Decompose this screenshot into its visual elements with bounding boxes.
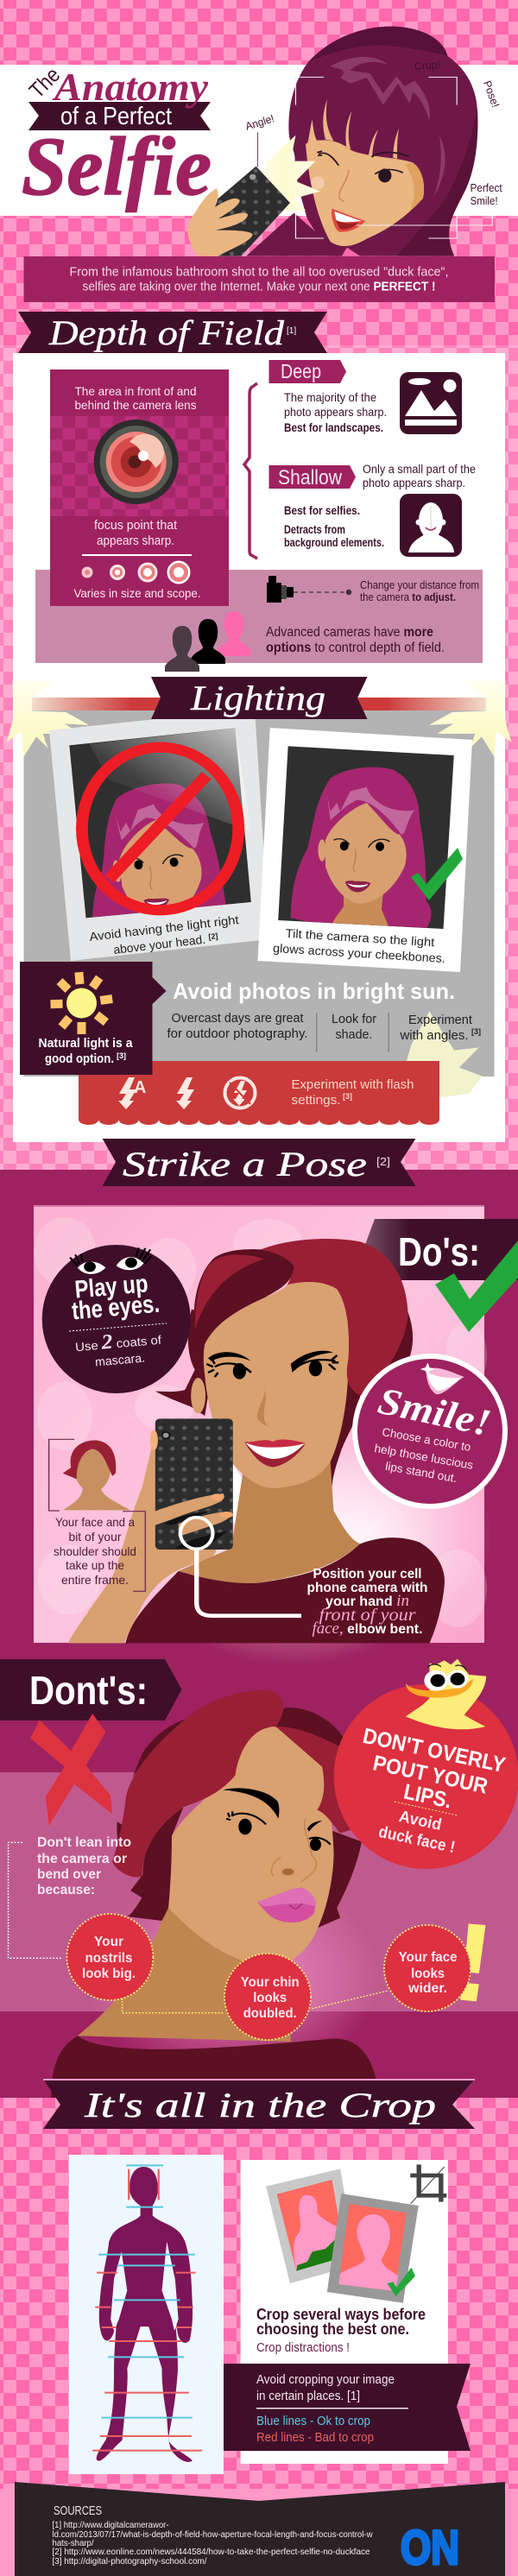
text: position your phone: front of your <box>319 1606 416 1625</box>
title: Selfie <box>22 120 212 212</box>
footer: sources <box>15 2482 505 2576</box>
icon: crop tool <box>410 2164 446 2204</box>
icon: three head silhouettes <box>165 611 251 672</box>
text: advanced cameras: Advanced cameras have more <box>266 625 433 640</box>
shallow field block: Shallow <box>278 466 343 489</box>
callout: wider face: wider. <box>407 1981 447 1996</box>
panel: depth of field white panel <box>13 353 505 1142</box>
deep field block: Best for landscapes. <box>284 421 383 434</box>
title: The <box>25 63 65 103</box>
photo: tilt the camera: glows across your cheekbones. <box>273 941 445 965</box>
figure silhouette <box>97 2167 193 2462</box>
callout: duck face: POUT YOUR <box>371 1751 490 1799</box>
deep field block <box>269 360 462 434</box>
intro banner: From the infamous bathroom shot to the all too overused "duck face", <box>69 264 449 280</box>
icon: landscape <box>400 372 462 434</box>
callout: duck face: LIPS. <box>401 1779 454 1813</box>
callout: chin <box>224 1954 311 2040</box>
labels around the selfie: Perfect <box>471 182 502 194</box>
text: avoid bright sun tips: shade. <box>335 1028 373 1042</box>
photo: tilt the camera <box>257 728 472 972</box>
heading: strike a pose ribbon <box>103 1139 415 1186</box>
legend: crop lines ribbon: Red lines - Bad to crop <box>256 2430 374 2445</box>
icon: flash settings: A <box>134 1078 146 1097</box>
shallow field block: Only a small part of the <box>363 463 476 476</box>
icon: prohibition sign <box>82 748 238 910</box>
flash settings awning: settings. <box>292 1094 340 1108</box>
callout: framing guide with mini figure: entire frame. <box>61 1573 129 1587</box>
footer: sources: [3] http://digital-photography-school.com/ <box>52 2556 207 2567</box>
flash settings awning: Experiment with flash <box>292 1078 414 1092</box>
text: avoid bright sun tips: Avoid photos in bright sun. <box>173 978 455 1004</box>
illustration: posing woman <box>67 1239 445 1643</box>
panel: body crop guide <box>69 2155 224 2474</box>
connector dots yellow <box>123 1991 388 2013</box>
text: don't lean: Don't lean into <box>37 1835 131 1850</box>
labels around the selfie: Crop! <box>414 59 440 73</box>
footer: sources: ld.com/2013/07/17/what-is-depth-of-field-how-aperture-focal-length-and-focus-control-w <box>52 2529 373 2540</box>
legend: crop lines ribbon: in certain places. [1] <box>256 2389 360 2403</box>
heading: don'ts ribbon: Dont's: <box>29 1668 148 1713</box>
text: advanced cameras: options to control depth of field. <box>266 641 445 655</box>
text: don't lean: the camera or <box>37 1852 127 1866</box>
heading: lighting ribbon <box>151 677 368 719</box>
heading: don'ts ribbon <box>0 1659 181 1720</box>
text: don't lean <box>37 1835 131 1897</box>
callout: duck face: DON'T OVERLY <box>361 1724 508 1777</box>
icon: green check small <box>387 2268 415 2296</box>
photo: avoid overhead light: [2] <box>208 931 218 941</box>
legend: crop lines ribbon: Avoid cropping your image <box>256 2372 395 2387</box>
heading: lighting ribbon: Lighting <box>190 679 325 717</box>
icon: lips <box>420 1362 464 1394</box>
text: position your phone: phone camera with <box>307 1581 428 1595</box>
legend: crop lines ribbon <box>224 2364 471 2451</box>
text: don't lean: because: <box>37 1883 95 1897</box>
text: do's label: Do's: <box>398 1229 480 1274</box>
illustration: header selfie woman <box>188 27 492 256</box>
flash settings awning: [3] <box>343 1092 352 1101</box>
callout: framing guide with mini figure: bit of your <box>69 1530 122 1544</box>
icon: depth of field rings <box>81 561 190 584</box>
crop lines <box>92 2165 202 2451</box>
icon: camera lens <box>94 420 179 504</box>
logo: ON: ON <box>401 2520 459 2574</box>
panel: strike a pose background <box>0 1170 518 2098</box>
callout: play up the eyes: the eyes. <box>71 1291 161 1325</box>
icon: camera to subject distance <box>267 576 351 603</box>
labels around the selfie: Angle! <box>244 112 275 133</box>
photo: avoid overhead light: above your head. <box>112 932 207 957</box>
photo: avoid overhead light <box>49 709 269 961</box>
callout: smile: lips stand out. <box>384 1460 458 1485</box>
callout: natural light: [3] <box>117 1051 126 1060</box>
heading: strike a pose ribbon: Strike a Pose <box>123 1145 367 1184</box>
brace <box>244 383 257 559</box>
photo: uncropped <box>266 2169 357 2283</box>
icon: red x <box>30 1714 112 1826</box>
callout: wider face: Your face <box>399 1950 458 1965</box>
callout: nostrils: look big. <box>82 1967 136 1981</box>
text: position your phone <box>307 1567 428 1638</box>
callout: smile: Choose a color to <box>381 1425 471 1454</box>
text: position your phone: your hand in <box>325 1592 409 1610</box>
callout: duck face <box>334 1659 518 1869</box>
callout: play up the eyes <box>42 1245 191 1393</box>
labels around the selfie: Smile! <box>471 195 498 207</box>
icon: lower burst <box>407 1012 483 1098</box>
footer: sources: SOURCES <box>54 2503 102 2518</box>
callout: chin: looks <box>253 1991 287 2005</box>
panel: depth of field definition card <box>50 369 229 606</box>
panel: crop photos: choosing the best one. <box>256 2320 409 2338</box>
text: position your phone: face, elbow bent. <box>313 1619 423 1638</box>
text: avoid bright sun tips: with angles. <box>399 1029 468 1043</box>
callout: smile: help those luscious <box>373 1442 475 1472</box>
shallow field block: Detracts from <box>284 523 345 536</box>
callout: natural light <box>20 962 166 1075</box>
legend: crop lines ribbon: Blue lines - Ok to crop <box>256 2414 370 2428</box>
intro banner <box>24 256 495 302</box>
heading: depth of field ribbon: [1] <box>287 326 296 336</box>
shallow field block: Best for selfies. <box>284 504 360 517</box>
text: change your distance <box>360 579 479 603</box>
callout: duck face: Avoid <box>397 1808 443 1834</box>
heading: strike a pose ribbon: [2] <box>376 1155 390 1168</box>
icon: spotlight bursts <box>7 680 511 757</box>
panel: depth of field definition card: The area in front of and <box>74 384 197 398</box>
footer: sources: [2] http://www.eonline.com/news/444584/how-to-take-the-perfect-selfie-no-duckface <box>52 2547 370 2557</box>
icon: duck <box>406 1659 486 1729</box>
shallow field block: background elements. <box>284 536 384 549</box>
callout: nostrils: nostrils <box>85 1951 133 1966</box>
callout: wider face: looks <box>411 1967 445 1981</box>
callout: play up the eyes: Play up <box>73 1270 149 1304</box>
title: Anatomy <box>52 65 209 109</box>
panel: lighting grey stage <box>7 680 511 1098</box>
title <box>22 63 212 212</box>
title: of a Perfect <box>60 103 172 130</box>
icon: green check <box>411 848 463 900</box>
heading: depth of field ribbon: Depth of Field <box>48 313 285 352</box>
callout: play up the eyes: mascara. <box>94 1351 146 1368</box>
text: avoid bright sun tips: [3] <box>471 1027 481 1036</box>
text: avoid bright sun tips: Experiment <box>408 1013 472 1027</box>
text: avoid bright sun tips: Look for <box>332 1013 376 1026</box>
deep field block: The majority of the <box>284 391 376 404</box>
callout: framing guide with mini figure <box>49 1439 145 1591</box>
deep field block: photo appears sharp. <box>284 406 387 419</box>
icon: flash settings <box>118 1077 256 1109</box>
callout: chin: Your chin <box>241 1975 300 1990</box>
callout: duck face: duck face ! <box>376 1823 457 1857</box>
callout: smile: Smile! <box>375 1380 495 1444</box>
shallow field block: photo appears sharp. <box>363 477 465 489</box>
labels around the selfie <box>244 59 502 207</box>
callout: nostrils <box>66 1914 153 2000</box>
icon: eyes <box>70 1247 151 1274</box>
do's ribbon <box>363 1219 518 1280</box>
heading: it's all in the crop ribbon <box>43 2079 475 2129</box>
panel: depth of field definition card: focus point that <box>94 518 178 533</box>
panel: pale pink tips band <box>35 570 483 672</box>
icon: exclamation mark <box>460 1923 485 2001</box>
photo: tilt the camera: Tilt the camera so the light <box>285 926 435 949</box>
icon: portrait <box>400 494 462 557</box>
labels around the selfie: Pose! <box>481 79 502 109</box>
text: change your distance: Change your distance from <box>360 579 479 591</box>
panel: crop photos: Crop distractions ! <box>256 2340 350 2355</box>
photo: cropped <box>327 2194 419 2303</box>
callout: framing guide with mini figure: Your face and a <box>55 1515 135 1529</box>
callout: natural light: Natural light is a <box>38 1037 133 1051</box>
check mark: do's <box>435 1241 518 1332</box>
text: avoid bright sun tips: Overcast days are great <box>171 1012 304 1026</box>
panel: crop photos <box>241 2160 448 2464</box>
callout: chin: doubled. <box>243 2006 297 2021</box>
illustration: leaning woman <box>51 1690 380 2098</box>
callout: framing guide with mini figure: shoulder should <box>54 1544 136 1558</box>
icon: sun <box>50 972 113 1034</box>
panel: depth of field definition card: Varies in size and scope. <box>74 586 200 600</box>
callout: natural light: good option. <box>45 1052 114 1066</box>
text: avoid bright sun tips <box>167 978 481 1052</box>
callout: play up the eyes: Use 2 coats of <box>74 1327 162 1356</box>
intro banner: selfies are taking over the Internet. Make your next one PERFECT ! <box>83 280 435 294</box>
callout: framing guide with mini figure: take up the <box>66 1558 124 1572</box>
heading: depth of field ribbon <box>18 312 327 353</box>
photo: avoid overhead light: Avoid having the light right <box>89 912 239 944</box>
text: don't lean: bend over <box>37 1867 101 1882</box>
panel: depth of field definition card: behind the camera lens <box>74 398 197 412</box>
text: change your distance: the camera to adjust. <box>360 591 456 603</box>
footer: sources: hats-sharp/ <box>52 2538 94 2548</box>
callout: nostrils: Your <box>94 1935 123 1949</box>
heading: it's all in the crop ribbon: It's all in the Crop <box>84 2086 436 2125</box>
panel: don'ts background stripe <box>0 1772 518 2080</box>
deep field block: Deep <box>281 360 321 382</box>
text: advanced cameras <box>266 625 445 655</box>
footer: sources: [1] http://www.digitalcamerawor- <box>52 2520 169 2530</box>
panel: depth of field definition card: appears sharp. <box>97 534 174 548</box>
panel: crop photos: Crop several ways before <box>256 2306 426 2323</box>
callout: smile <box>355 1356 505 1506</box>
text: avoid bright sun tips: for outdoor photography. <box>167 1027 307 1041</box>
callout: wider face <box>384 1925 471 2011</box>
shallow field block <box>269 463 476 557</box>
text: position your phone: Position your cell <box>313 1567 421 1582</box>
connector dots <box>9 1842 61 1958</box>
flash settings awning <box>79 1061 439 1125</box>
